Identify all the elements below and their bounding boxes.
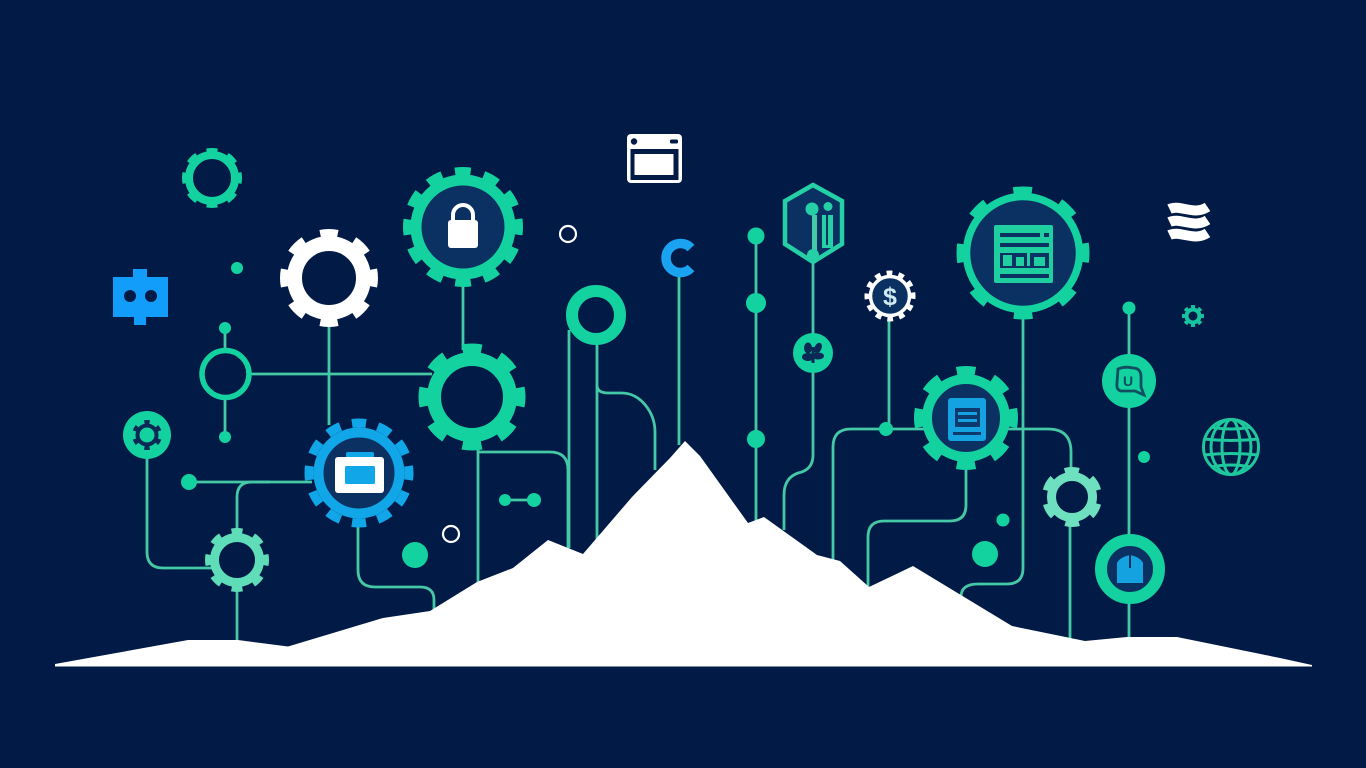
gear: big teal with document bbox=[960, 190, 1086, 316]
gear: blue with folder bbox=[309, 423, 409, 523]
gear: large teal centre bbox=[423, 348, 521, 446]
decorative dots bbox=[402, 493, 541, 568]
dot bbox=[231, 262, 243, 274]
small ring bbox=[560, 226, 576, 242]
icon: speech bubble: U bbox=[1123, 373, 1133, 389]
gear: teal with notepad bbox=[918, 370, 1014, 466]
gear: pale teal right bbox=[1045, 470, 1099, 524]
gear: white bbox=[284, 233, 374, 323]
icon: white waves bbox=[1170, 207, 1208, 236]
icon: folder window bbox=[335, 452, 384, 493]
icon: notepad bbox=[948, 398, 986, 441]
white mountain silhouette bbox=[55, 441, 1312, 666]
icon: blue letter C bbox=[666, 244, 691, 272]
teal ring with house icon bbox=[1101, 540, 1159, 598]
small teal gear far right bbox=[1184, 306, 1202, 326]
icon: house bbox=[1117, 555, 1143, 583]
gear: lock bbox=[407, 171, 519, 283]
circuit connector lines bbox=[147, 236, 1129, 642]
teal circle with gear icon bbox=[123, 411, 171, 459]
gear: dollar bbox=[867, 273, 913, 319]
dollar sign: $ bbox=[883, 283, 897, 311]
icon: browser window bbox=[627, 134, 682, 183]
stem dots bbox=[746, 228, 766, 448]
icon: padlock bbox=[448, 205, 478, 248]
ring node bbox=[572, 291, 620, 339]
icon: data sheet bbox=[994, 225, 1053, 283]
icon: globe bbox=[1204, 420, 1258, 474]
ring node with end dots bbox=[202, 322, 249, 443]
dot with connector bbox=[181, 474, 197, 490]
hexagon badge bbox=[785, 185, 842, 262]
icon: blue robot block bbox=[113, 269, 168, 325]
decorative dots right bbox=[972, 302, 1150, 567]
junction dot bbox=[879, 422, 893, 436]
teal circle with chat icon bbox=[1102, 354, 1156, 408]
icon: dark gear bbox=[134, 422, 160, 448]
teal circle with clover icon bbox=[793, 333, 833, 373]
gear: light teal lower left bbox=[208, 531, 266, 589]
gear: small teal top left bbox=[184, 150, 240, 206]
